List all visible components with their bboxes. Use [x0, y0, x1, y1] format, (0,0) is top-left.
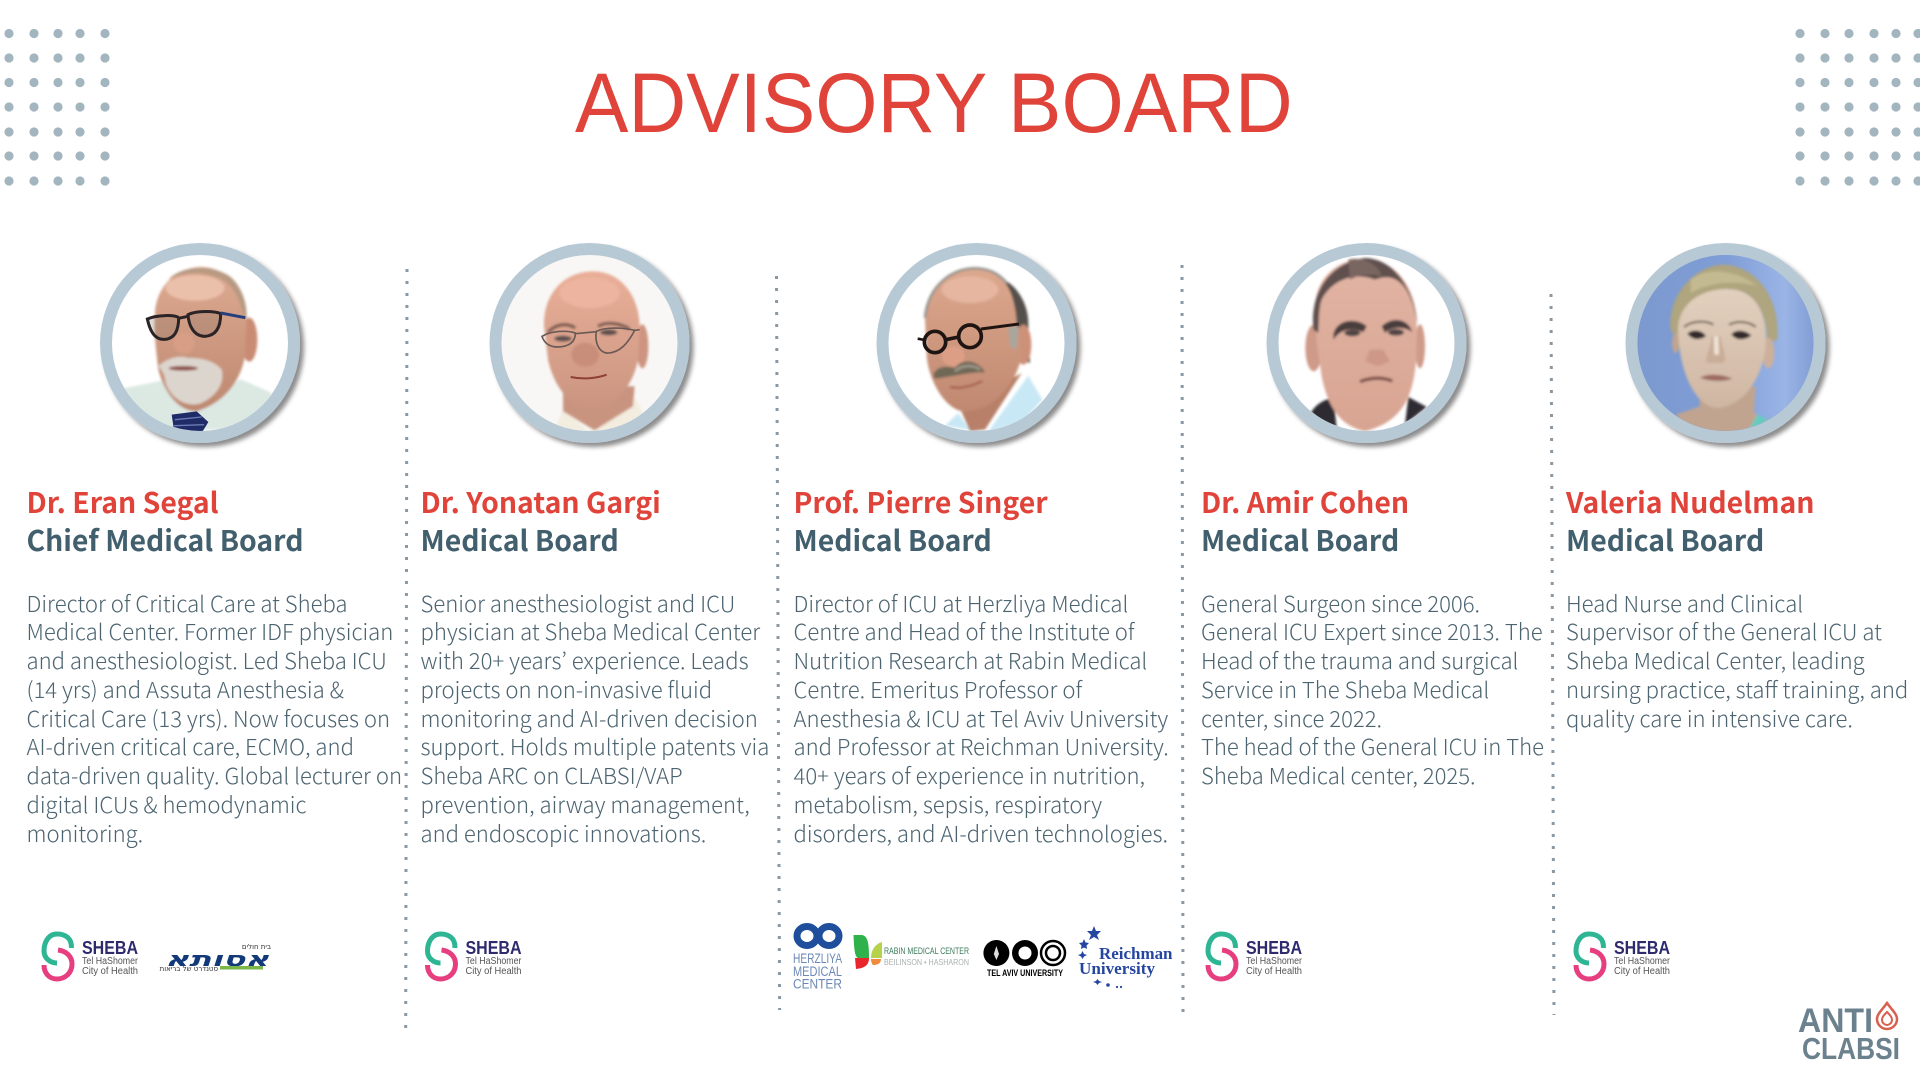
decorative dot grid: top right — [1795, 29, 1920, 186]
biography: metabolism, sepsis, respiratory — [794, 788, 1102, 820]
panel: Valeria Nudelman — [1566, 481, 1908, 734]
biography: physician at Sheba Medical Center — [420, 615, 760, 647]
logo: Tel Aviv University — [983, 940, 1065, 979]
portrait: Prof. Pierre Singer — [882, 249, 1070, 437]
panel: Dr. Yonatan Gargi — [420, 481, 769, 848]
logo: Sheba (Dr. Amir Cohen): City of Health — [1246, 966, 1302, 977]
biography: 40+ years of experience in nutrition, — [794, 759, 1145, 791]
biography: support. Holds multiple patents via — [420, 730, 769, 762]
logo: Sheba (Dr. Eran Segal): Tel HaShomer — [82, 956, 139, 967]
biography: and Professor at Reichman University. — [794, 730, 1169, 762]
biography: Head Nurse and Clinical — [1566, 586, 1803, 618]
title: ADVISORY BOARD — [575, 56, 1293, 150]
panel: Dr. Amir Cohen — [1201, 481, 1544, 791]
logo: Herzliya Medical Center — [793, 926, 842, 992]
biography: digital ICUs & hemodynamic — [26, 788, 306, 820]
logo: Sheba (Dr. Yonatan Gargi): SHEBA — [466, 937, 522, 958]
biography: The head of the General ICU in The — [1201, 730, 1544, 762]
biography: monitoring. — [26, 816, 143, 848]
logo: Sheba (Valeria Nudelman): SHEBA — [1614, 937, 1670, 958]
biography: Senior anesthesiologist and ICU — [420, 586, 735, 618]
logo: Sheba (Dr. Amir Cohen): Tel HaShomer — [1246, 956, 1303, 967]
logo: Assuta: אסותא — [165, 947, 270, 971]
name: Valeria Nudelman — [1566, 481, 1814, 522]
logo: Reichman University: University — [1079, 959, 1156, 978]
biography: quality care in intensive care. — [1566, 702, 1853, 734]
logo: Herzliya Medical Center: CENTER — [793, 976, 842, 992]
logo: Herzliya Medical Center: MEDICAL — [793, 964, 842, 979]
portrait: Dr. Eran Segal — [106, 249, 294, 437]
logo: Reichman University — [1078, 926, 1172, 988]
biography: nursing practice, staff training, and — [1566, 673, 1908, 705]
biography — [1566, 586, 1908, 734]
portrait: Valeria Nudelman — [1632, 249, 1820, 437]
biography: projects on non-invasive fluid — [420, 673, 712, 705]
biography: AI-driven critical care, ECMO, and — [26, 730, 354, 762]
biography: Head of the trauma and surgical — [1201, 644, 1518, 676]
logo: Rabin Medical Center: RABIN MEDICAL CENTER — [884, 946, 969, 957]
biography: (14 yrs) and Assuta Anesthesia & — [26, 673, 344, 705]
biography: General ICU Expert since 2013. The — [1201, 615, 1543, 647]
logo: Tel Aviv University: TEL AVIV UNIVERSITY — [987, 968, 1063, 979]
logo: Assuta — [160, 943, 271, 973]
logo: Sheba (Dr. Yonatan Gargi) — [428, 934, 522, 979]
biography: General Surgeon since 2006. — [1201, 586, 1480, 618]
panel: Dr. Eran Segal — [26, 481, 402, 848]
biography: Director of Critical Care at Sheba — [26, 586, 348, 618]
biography: Supervisor of the General ICU at — [1566, 615, 1882, 647]
biography: disorders, and AI-driven technologies. — [794, 816, 1168, 848]
biography: Nutrition Research at Rabin Medical — [794, 644, 1147, 676]
logo: Sheba (Dr. Amir Cohen) — [1208, 934, 1303, 979]
name: Prof. Pierre Singer — [794, 481, 1048, 522]
biography: monitoring and AI-driven decision — [420, 702, 758, 734]
biography: center, since 2022. — [1201, 702, 1382, 734]
portrait: Dr. Yonatan Gargi — [496, 249, 684, 437]
biography — [1201, 586, 1544, 791]
biography: Centre and Head of the Institute of — [794, 615, 1134, 647]
logo: Anti CLABSI — [1798, 1002, 1900, 1066]
logo: Sheba (Valeria Nudelman): City of Health — [1614, 966, 1670, 977]
biography: Centre. Emeritus Professor of — [794, 673, 1082, 705]
role: Medical Board — [420, 519, 619, 560]
biography: Sheba Medical center, 2025. — [1201, 759, 1476, 791]
name: Dr. Eran Segal — [26, 481, 219, 522]
dotted column dividers — [406, 265, 1554, 1028]
logo: Sheba (Dr. Eran Segal): City of Health — [82, 966, 138, 977]
logo: Herzliya Medical Center: HERZLIYA — [793, 951, 842, 966]
logo: Anti CLABSI: CLABSI — [1802, 1031, 1900, 1066]
logo: Rabin Medical Center — [854, 935, 969, 969]
logo: Sheba (Dr. Eran Segal): SHEBA — [82, 937, 138, 958]
logo: Rabin Medical Center: BEILINSON • HASHARON — [884, 957, 969, 967]
portrait: Dr. Amir Cohen — [1272, 249, 1460, 437]
panel: Prof. Pierre Singer — [794, 481, 1169, 848]
logo: Reichman University: Reichman — [1099, 944, 1172, 963]
logo: Sheba (Dr. Yonatan Gargi): City of Health — [466, 966, 522, 977]
logo: Assuta: סטנדרט של בריאות — [160, 965, 218, 973]
role: Chief Medical Board — [26, 519, 304, 560]
name: Dr. Yonatan Gargi — [420, 481, 661, 522]
biography: and anesthesiologist. Led Sheba ICU — [26, 644, 387, 676]
biography: Sheba Medical Center, leading — [1566, 644, 1865, 676]
biography: data-driven quality. Global lecturer on — [26, 759, 402, 791]
name: Dr. Amir Cohen — [1201, 481, 1409, 522]
logo: Sheba (Valeria Nudelman): Tel HaShomer — [1614, 956, 1671, 967]
biography: Critical Care (13 yrs). Now focuses on — [26, 702, 390, 734]
biography: Medical Center. Former IDF physician — [26, 615, 393, 647]
biography: with 20+ years’ experience. Leads — [420, 644, 749, 676]
biography — [26, 586, 402, 848]
biography: Service in The Sheba Medical — [1201, 673, 1489, 705]
role: Medical Board — [1201, 519, 1399, 560]
logo: Assuta: בית חולים — [242, 943, 271, 951]
biography: Anesthesia & ICU at Tel Aviv University — [794, 702, 1168, 734]
biography — [794, 586, 1169, 848]
biography: Director of ICU at Herzliya Medical — [794, 586, 1128, 618]
logo: Sheba (Dr. Yonatan Gargi): Tel HaShomer — [466, 956, 522, 967]
logo: Sheba (Valeria Nudelman) — [1576, 934, 1671, 979]
biography: prevention, airway management, — [420, 788, 750, 820]
decorative dot grid: top left — [4, 29, 110, 186]
role: Medical Board — [1566, 519, 1764, 560]
logo: Sheba (Dr. Amir Cohen): SHEBA — [1246, 937, 1302, 958]
logo: Sheba (Dr. Eran Segal) — [44, 934, 139, 979]
logo: Anti CLABSI: ANTI — [1798, 1002, 1873, 1040]
biography: Sheba ARC on CLABSI/VAP — [420, 759, 683, 791]
role: Medical Board — [794, 519, 992, 560]
biography — [420, 586, 769, 848]
biography: and endoscopic innovations. — [420, 816, 706, 848]
